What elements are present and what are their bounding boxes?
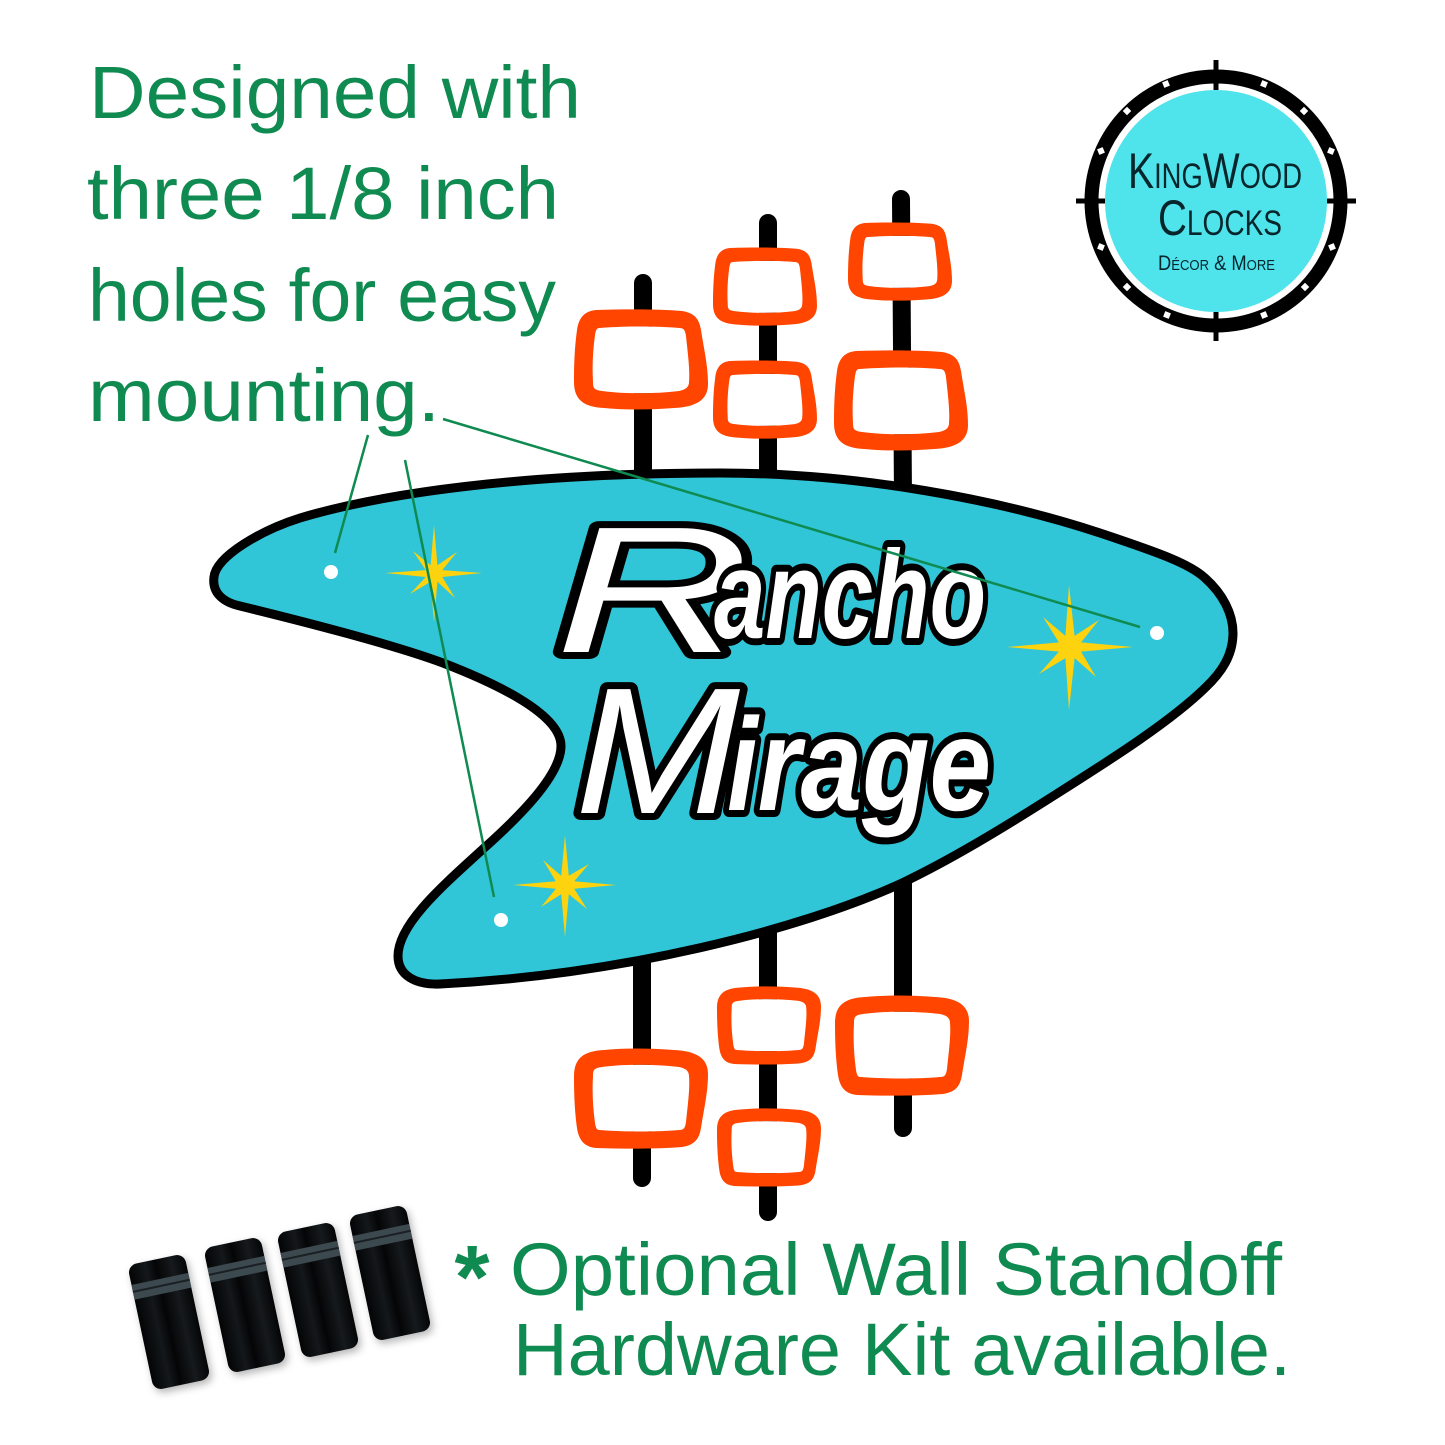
star: bottom (513, 835, 616, 937)
standoff 1 (127, 1253, 213, 1395)
mounting hole: bottom (494, 913, 508, 927)
poles: upper atomic rods (643, 199, 903, 500)
logo: KingWood Clocks: Décor & More (1158, 252, 1275, 275)
standoff 4 (348, 1204, 434, 1346)
heading: mounting holes note: holes for easy (88, 254, 556, 337)
logo: KingWood Clocks: KingWood (1128, 143, 1302, 199)
star: right (1007, 585, 1133, 710)
hardware kit: standoffs (127, 1204, 434, 1395)
script title: Rancho Mirage: ancho (714, 526, 986, 665)
text: optional hardware kit: Hardware Kit available. (513, 1308, 1291, 1391)
heading: mounting holes note: three 1/8 inch (87, 152, 559, 235)
upper orange frames (574, 222, 968, 450)
standoff 3 (276, 1221, 362, 1363)
heading: mounting holes note: mounting. (88, 354, 440, 437)
mounting hole: left (324, 565, 338, 579)
standoff 2 (203, 1236, 289, 1378)
script title: Rancho Mirage: R (555, 490, 750, 691)
text: optional hardware kit: Optional Wall Standoff (510, 1228, 1282, 1311)
star: left (385, 525, 482, 622)
mounting hole: right (1150, 626, 1164, 640)
boomerang sign (214, 473, 1233, 984)
pointer lines to holes (335, 419, 1140, 897)
lower orange frames (574, 986, 969, 1187)
script title: Rancho Mirage: irage (727, 691, 991, 838)
asterisk: * (454, 1228, 490, 1328)
logo: KingWood Clocks (1076, 60, 1356, 341)
poles: lower atomic rods (642, 860, 903, 1212)
logo: KingWood Clocks: Clocks (1158, 190, 1282, 246)
heading: mounting holes note (87, 51, 581, 437)
script title: Rancho Mirage (555, 490, 991, 852)
text: optional hardware kit (510, 1228, 1291, 1391)
heading: mounting holes note: Designed with (89, 51, 581, 134)
script title: Rancho Mirage: M (575, 651, 740, 852)
